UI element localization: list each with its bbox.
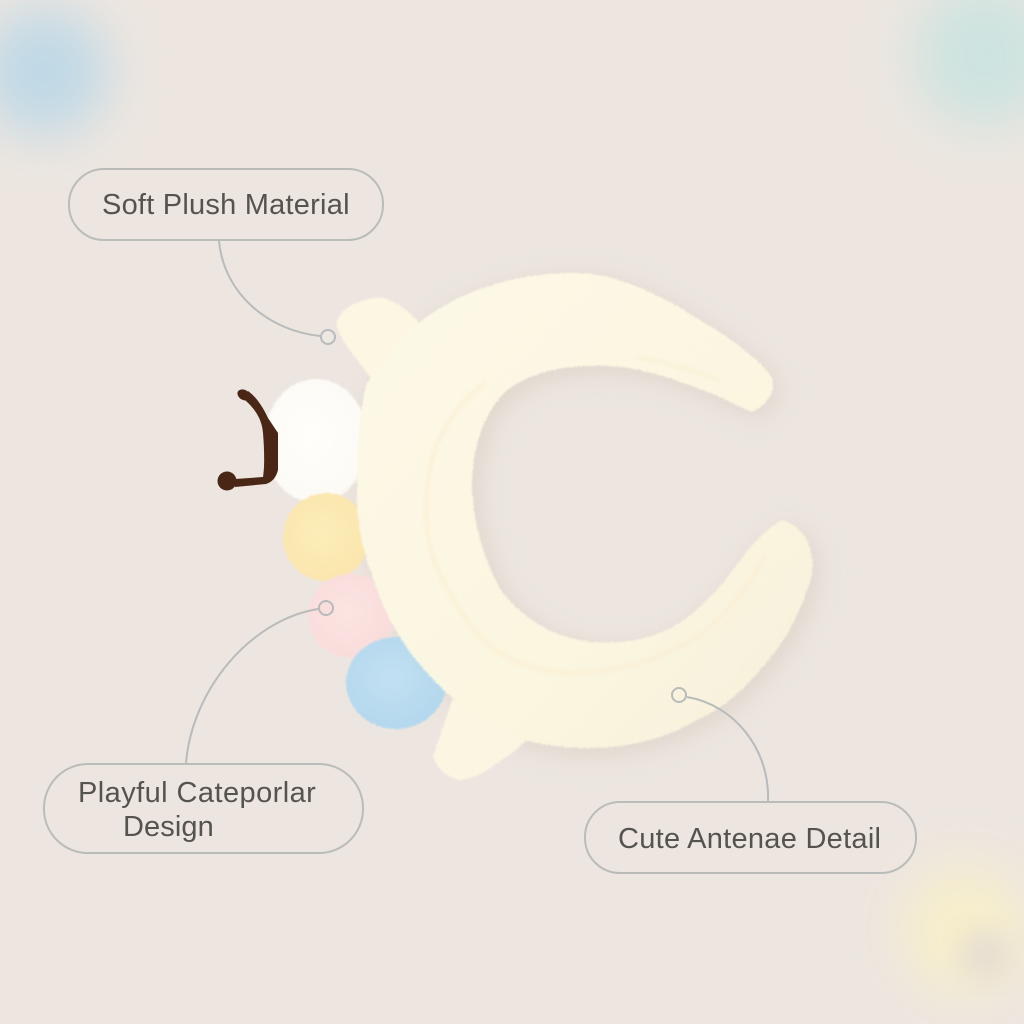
callout: Cute Antenae Detail — [585, 688, 916, 873]
callout: Playful Cateporlar Design: Playful Cateporlar — [78, 777, 316, 809]
pom pom white — [264, 379, 368, 503]
pom pom yellow — [283, 493, 369, 581]
antennae — [218, 387, 278, 490]
pom pom pink — [308, 574, 394, 658]
shadow under headband — [363, 279, 819, 754]
callout: Soft Plush Material — [69, 169, 383, 344]
plush ear top — [337, 298, 420, 380]
band seam — [426, 383, 767, 673]
callout: Playful Cateporlar Design — [44, 601, 363, 853]
callout: Soft Plush Material: Soft Plush Material — [102, 189, 350, 221]
plush ear bottom — [433, 698, 526, 780]
callout: Playful Cateporlar Design: Design — [123, 811, 214, 843]
product: caterpillar plush headband — [218, 273, 813, 780]
crescent band — [357, 273, 813, 748]
upper band seam — [635, 357, 720, 381]
callout: Cute Antenae Detail: Cute Antenae Detail — [618, 823, 881, 855]
pom pom blue — [346, 637, 446, 729]
